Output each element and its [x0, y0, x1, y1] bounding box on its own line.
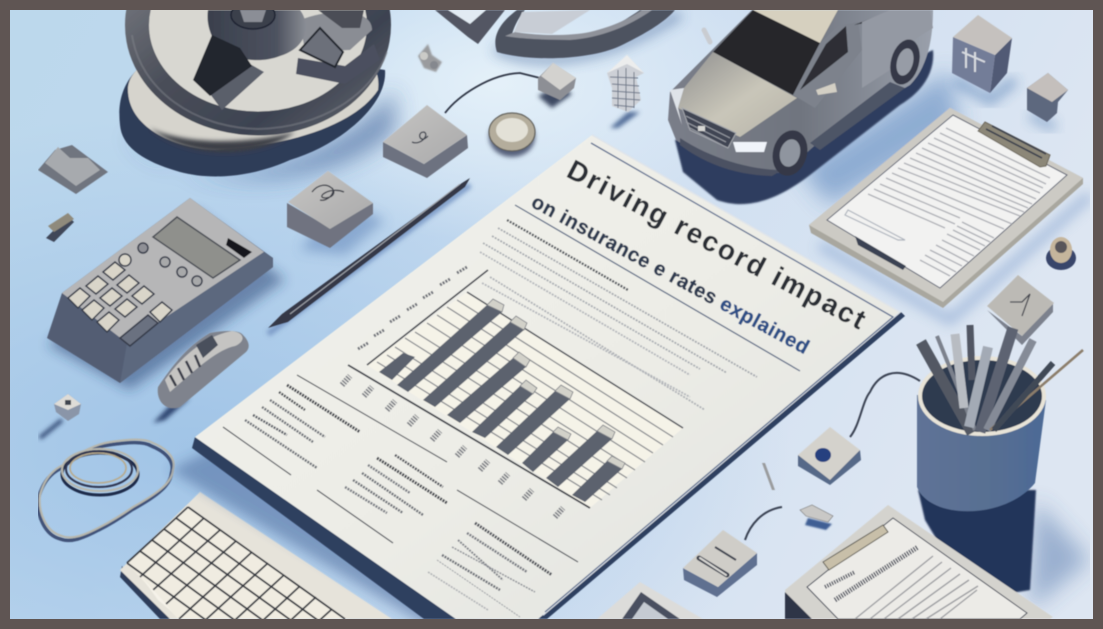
icon: top centre curved object [435, 10, 680, 60]
heading: subtitle: on insurance e rates explained [528, 191, 813, 359]
icon: round badge [1046, 237, 1076, 270]
icon: mesh cone trinket [607, 55, 644, 128]
icon: tile with signature B [383, 105, 468, 178]
icon: small clip pieces [762, 463, 833, 530]
bars [379, 305, 622, 502]
icon: left chip [38, 145, 108, 194]
text block: centre column [345, 455, 447, 515]
icon: house block small [1027, 73, 1068, 128]
icon: house block large [952, 15, 1015, 100]
icon: tile with checkmark [987, 275, 1054, 345]
y-axis labels [358, 267, 467, 349]
text block: left column [245, 385, 360, 468]
divider under title [515, 205, 800, 371]
icon: keyboard [120, 492, 392, 629]
icon: clipboard with form [809, 108, 1090, 320]
icon: small trinket top [418, 44, 442, 72]
icon: round coin [489, 113, 535, 157]
icon: usb tag with cable [683, 507, 782, 597]
divider lines below chart [223, 375, 578, 562]
icon: tile with signature A [287, 171, 385, 255]
icon: sensor tile with cable [445, 63, 576, 113]
icon: steering wheel [119, 0, 395, 179]
icon: car [668, 10, 960, 205]
text block: intro paragraph [480, 220, 757, 410]
icon: tablet corner [597, 582, 703, 619]
icon: tiny striped clip [46, 213, 74, 242]
icon: pen [268, 178, 470, 334]
icon: tiny cube [40, 394, 81, 438]
icon: pencil cup [917, 325, 1090, 610]
icon: coiled cable [38, 440, 174, 540]
heading: title: Driving record impact [562, 154, 871, 335]
icon: key fob [153, 331, 249, 423]
icon: sensor with blue dot [798, 373, 920, 485]
text block: right column [428, 523, 552, 617]
panel: report document [170, 135, 905, 629]
bar chart: rates by record [342, 267, 683, 517]
icon: calculator [47, 198, 285, 390]
icon: stack of papers [785, 505, 1053, 619]
x-axis labels [342, 376, 563, 517]
